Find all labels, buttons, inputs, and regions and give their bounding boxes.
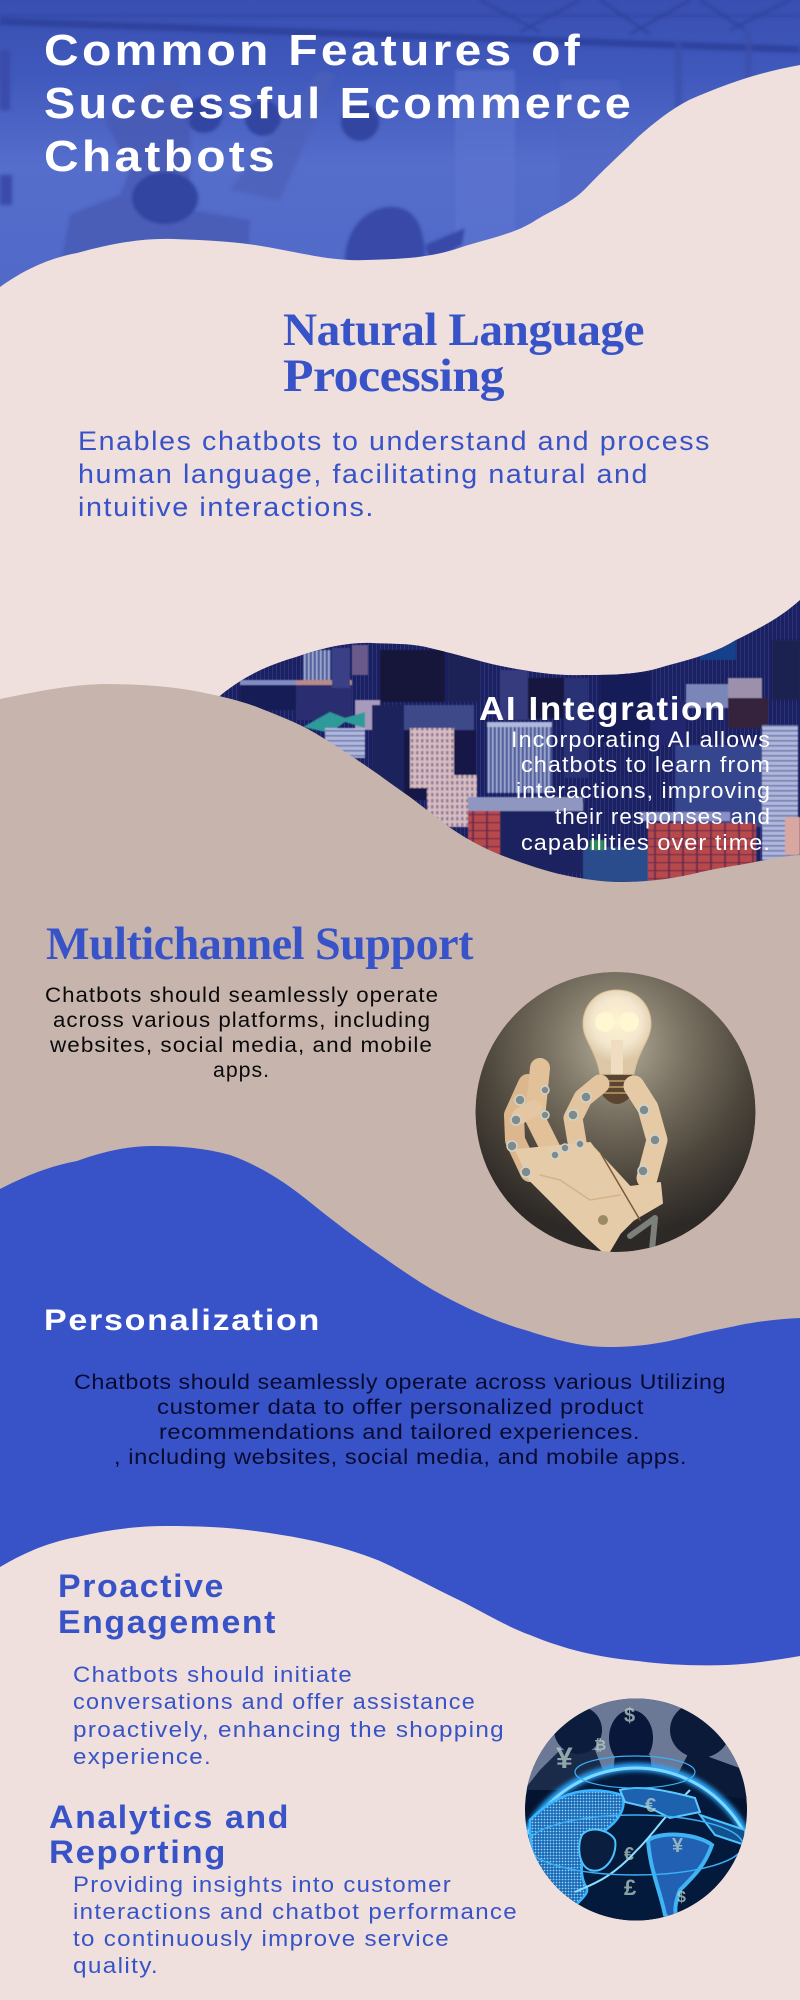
text: analytics and reporting description: Providing insights into customer <box>73 1872 452 1897</box>
wave: blue personalization panel <box>0 1146 800 1700</box>
photo: city skyline with navy tint <box>220 600 800 882</box>
photo: hero warehouse with blue tint <box>0 0 800 300</box>
text: multichannel support description <box>45 983 439 1082</box>
heading: proactive engagement: Engagement <box>58 1604 277 1640</box>
icon: light bulb <box>583 990 651 1104</box>
text: natural language processing description <box>78 426 711 522</box>
text: multichannel support description: apps. <box>213 1058 270 1082</box>
text: AI integration description: interactions, improving <box>516 778 771 803</box>
photo: digital globe with silhouettes: ¥ <box>672 1835 684 1857</box>
photo: digital globe with silhouettes <box>525 1698 747 1920</box>
text: personalization description: recommendations and tailored experiences. <box>159 1420 640 1444</box>
text: natural language processing description: Enables chatbots to understand and process <box>78 426 711 456</box>
title: Successful Ecommerce <box>44 79 634 128</box>
title: Chatbots <box>44 132 278 181</box>
text: AI integration description: capabilities over time. <box>521 830 771 855</box>
heading: personalization: Personalization <box>44 1304 321 1337</box>
wave: pink natural language panel <box>0 65 800 720</box>
title <box>44 26 634 181</box>
photo: robot hand holding light bulb <box>476 972 756 1255</box>
text: natural language processing description: human language, facilitating natural and <box>78 459 649 489</box>
text: personalization description: customer data to offer personalized product <box>157 1395 644 1419</box>
text: analytics and reporting description: to continuously improve service <box>73 1926 450 1951</box>
text: AI integration description: their responses and <box>555 804 771 829</box>
text: personalization description <box>74 1370 726 1469</box>
text: analytics and reporting description: quality. <box>73 1953 159 1978</box>
text: proactive engagement description: proactively, enhancing the shopping <box>73 1717 505 1742</box>
text: proactive engagement description: experience. <box>73 1744 212 1769</box>
photo: digital globe with silhouettes: ₿ <box>594 1737 606 1754</box>
text: multichannel support description: Chatbots should seamlessly operate <box>45 983 439 1007</box>
heading: natural language processing <box>283 304 644 402</box>
photo: digital globe with silhouettes: € <box>624 1844 634 1864</box>
text: personalization description: Chatbots should seamlessly operate across various Utilizing <box>74 1370 726 1394</box>
text: analytics and reporting description <box>73 1872 518 1978</box>
photo: digital globe with silhouettes: € <box>645 1795 656 1817</box>
wave: tan multichannel panel <box>0 684 800 1400</box>
photo: digital globe with silhouettes: ¥ <box>556 1742 573 1775</box>
text: natural language processing description: intuitive interactions. <box>78 492 375 522</box>
icon: robot hand <box>507 1068 662 1255</box>
heading: analytics and reporting: Reporting <box>49 1834 227 1870</box>
heading: analytics and reporting: Analytics and <box>49 1799 290 1835</box>
heading: natural language processing: Processing <box>283 350 505 402</box>
photo: digital globe with silhouettes: £ <box>624 1875 637 1900</box>
text: proactive engagement description: conversations and offer assistance <box>73 1689 476 1714</box>
heading: multichannel support: Multichannel Support <box>46 918 474 970</box>
heading: natural language processing: Natural Language <box>283 304 644 356</box>
text: multichannel support description: across various platforms, including <box>53 1008 431 1032</box>
heading: AI integration: AI Integration <box>479 690 727 727</box>
text: AI integration description: chatbots to learn from <box>521 752 771 777</box>
text: multichannel support description: websites, social media, and mobile <box>49 1033 433 1057</box>
text: personalization description: , including websites, social media, and mobile apps. <box>114 1445 687 1469</box>
text: proactive engagement description: Chatbots should initiate <box>73 1662 353 1687</box>
wave: pink lower panel <box>0 1526 800 2000</box>
heading: analytics and reporting <box>49 1799 290 1870</box>
photo: digital globe with silhouettes: $ <box>624 1705 635 1727</box>
text: analytics and reporting description: interactions and chatbot performance <box>73 1899 518 1924</box>
text: proactive engagement description <box>73 1662 505 1769</box>
text: AI integration description <box>511 727 771 855</box>
heading: proactive engagement: Proactive <box>58 1568 225 1604</box>
heading: proactive engagement <box>58 1568 277 1640</box>
photo: digital globe with silhouettes: $ <box>677 1889 686 1906</box>
text: AI integration description: Incorporating AI allows <box>511 727 771 752</box>
title: Common Features of <box>44 26 583 75</box>
